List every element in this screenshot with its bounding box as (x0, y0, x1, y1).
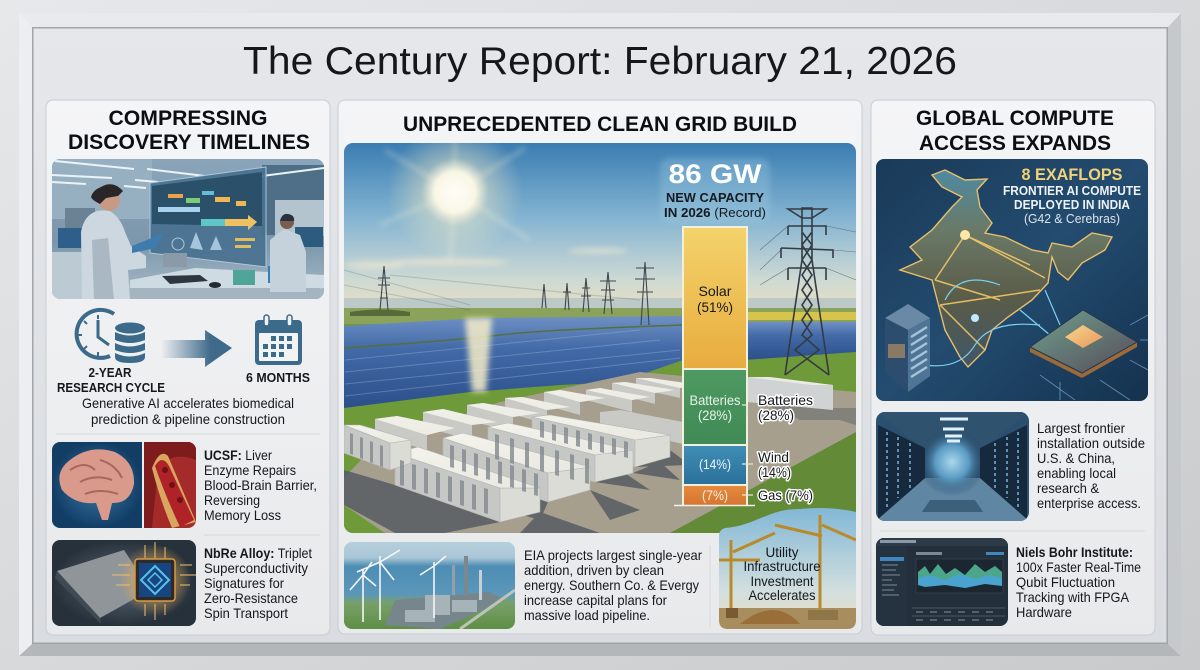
server rack (885, 304, 930, 330)
image: qubit monitoring dashboard (876, 538, 1008, 626)
heading: global compute (916, 107, 1114, 155)
bar segment: batteries 28%: (28%) (698, 407, 732, 423)
text: largest frontier installation: enabling local (1037, 465, 1116, 481)
text: EIA projection (524, 547, 702, 623)
bar segment: wind 14%: (14%) (699, 456, 731, 472)
arrow: two years to six months (161, 330, 232, 367)
text: utility infrastructure investment (744, 544, 821, 603)
text: utility infrastructure investment: Utility (766, 544, 798, 560)
label: batteries 28% (758, 392, 813, 423)
text: NbRe alloy finding (204, 545, 312, 621)
heading: clean grid build: UNPRECEDENTED CLEAN GRID BUILD (403, 113, 797, 136)
bar segment: solar 51% (684, 228, 746, 368)
callout: 86 GW new capacity: NEW CAPACITY (666, 190, 764, 205)
callout: 86 GW new capacity: 86 GW (668, 159, 762, 189)
AI chip (1030, 347, 1083, 378)
image: India compute map (876, 159, 1148, 401)
text: largest frontier installation: installation outside (1037, 435, 1145, 451)
label: batteries 28%: Batteries (758, 392, 813, 408)
text: largest frontier installation: U.S. & China, (1037, 450, 1115, 466)
battery shadows (344, 450, 682, 533)
text: Niels Bohr Institute finding: Qubit Fluctuation (1016, 574, 1115, 590)
heading: global compute: ACCESS EXPANDS (919, 132, 1111, 155)
text: Niels Bohr Institute finding: Niels Bohr Institute: (1016, 544, 1133, 560)
text: EIA projection: EIA projects largest single-year (524, 547, 702, 563)
image: data center aisle (876, 412, 1029, 521)
lab bench (130, 268, 324, 288)
bar segment: solar 51%: Solar (698, 283, 732, 299)
label: wind 14% (758, 449, 791, 480)
text: generative AI summary: prediction & pipeline construction (91, 411, 285, 427)
battery rows front (344, 415, 670, 522)
label: batteries 28%: (28%) (758, 407, 794, 423)
label: 2-year research cycle: RESEARCH CYCLE (57, 380, 165, 395)
label: wind 14%: Wind (758, 449, 789, 465)
text: UCSF finding: Enzyme Repairs (204, 462, 296, 478)
text: EIA projection: energy. Southern Co. & Evergy (524, 577, 699, 593)
text: largest frontier installation: Largest frontier (1037, 420, 1125, 436)
heading: global compute: GLOBAL COMPUTE (916, 107, 1114, 130)
bar segment: gas 7%: (7%) (702, 487, 728, 503)
text: Niels Bohr Institute finding: 100x Faster Real-Time (1016, 559, 1141, 575)
text: UCSF finding: UCSF: Liver (204, 447, 272, 463)
small transmission towers (344, 262, 655, 325)
image: utility infrastructure construction (718, 505, 856, 629)
label: 2-year research cycle: 2-YEAR (88, 365, 132, 380)
label: gas 7%: Gas (7%) (758, 487, 813, 503)
text: 8 exaflops callout (1003, 165, 1141, 226)
text: Niels Bohr Institute finding: Tracking with FPGA (1016, 589, 1130, 605)
title: The Century Report: February 21, 2026 (243, 40, 957, 83)
bar segment: batteries 28% (684, 370, 746, 444)
panel: global compute access expands (871, 100, 1155, 635)
callout: 86 GW new capacity: IN 2026 (Record) (664, 205, 766, 220)
text: UCSF finding: Reversing (204, 492, 260, 508)
icon: clock and database (77, 310, 145, 363)
text: NbRe alloy finding: Superconductivity (204, 560, 308, 576)
heading: compressing discovery timelines: DISCOVERY TIMELINES (68, 131, 310, 154)
text: largest frontier installation: research & (1037, 480, 1100, 496)
image: wind turbines and power plant (344, 542, 515, 629)
image: solar farm with battery storage (344, 124, 856, 538)
panel: unprecedented clean grid build (338, 100, 862, 634)
back monitors (58, 228, 82, 248)
text: 8 exaflops callout: (G42 & Cerebras) (1024, 211, 1120, 226)
text: Niels Bohr Institute finding: Hardware (1016, 604, 1072, 620)
text: utility infrastructure investment: Accelerates (748, 587, 816, 603)
text: generative AI summary: Generative AI accelerates biomedical (82, 395, 294, 411)
ground (344, 372, 856, 533)
text: 8 exaflops callout: DEPLOYED IN INDIA (1014, 197, 1131, 212)
text: largest frontier installation: enterprise access. (1037, 495, 1141, 511)
label: 2-year research cycle (57, 365, 165, 395)
text: 8 exaflops callout: 8 EXAFLOPS (1022, 165, 1122, 184)
text: EIA projection: increase capital plans for (524, 592, 667, 608)
text: NbRe alloy finding: Signatures for (204, 575, 284, 591)
image: AI lab scientist with timeline display (52, 159, 324, 300)
land and fields (344, 324, 856, 533)
holographic display (150, 167, 266, 267)
icon: calendar (255, 315, 302, 365)
back scientist (270, 229, 306, 292)
text: utility infrastructure investment: Infrastructure (744, 558, 821, 574)
text: UCSF finding: Blood-Brain Barrier, (204, 477, 317, 493)
scientist (81, 210, 146, 299)
bar segment: batteries 28%: Batteries (690, 392, 740, 408)
text: utility infrastructure investment: Investment (750, 573, 814, 589)
battery rows back (586, 378, 682, 444)
text: largest frontier installation (1037, 420, 1145, 511)
label: wind 14%: (14%) (758, 464, 791, 480)
large transmission tower (760, 208, 856, 375)
text: generative AI summary (82, 395, 294, 427)
solar arrays (344, 316, 683, 408)
text: EIA projection: massive load pipeline. (524, 607, 650, 623)
image: brain and blood vessel (52, 442, 196, 528)
heading: compressing discovery timelines: COMPRESSING (108, 107, 268, 130)
text: NbRe alloy finding: NbRe Alloy: Triplet (204, 545, 312, 561)
panel: compressing discovery timelines (46, 100, 330, 635)
text: UCSF finding (204, 447, 317, 523)
text: UCSF finding: Memory Loss (204, 507, 281, 523)
text: EIA projection: addition, driven by clean (524, 562, 664, 578)
heading: compressing discovery timelines (68, 107, 310, 154)
chart: 86 GW capacity mix (660, 158, 813, 506)
callout: 86 GW new capacity (660, 158, 770, 222)
bar segment: gas 7% (684, 486, 746, 505)
text: NbRe alloy finding: Zero-Resistance (204, 590, 298, 606)
bar segment: solar 51%: (51%) (697, 299, 733, 315)
label: 6 months: 6 MONTHS (246, 370, 310, 385)
text: 8 exaflops callout: FRONTIER AI COMPUTE (1003, 183, 1141, 198)
text: Niels Bohr Institute finding (1016, 544, 1141, 620)
bar segment: wind 14% (684, 446, 746, 484)
image: NbRe alloy chip (52, 540, 196, 626)
text: NbRe alloy finding: Spin Transport (204, 605, 288, 621)
